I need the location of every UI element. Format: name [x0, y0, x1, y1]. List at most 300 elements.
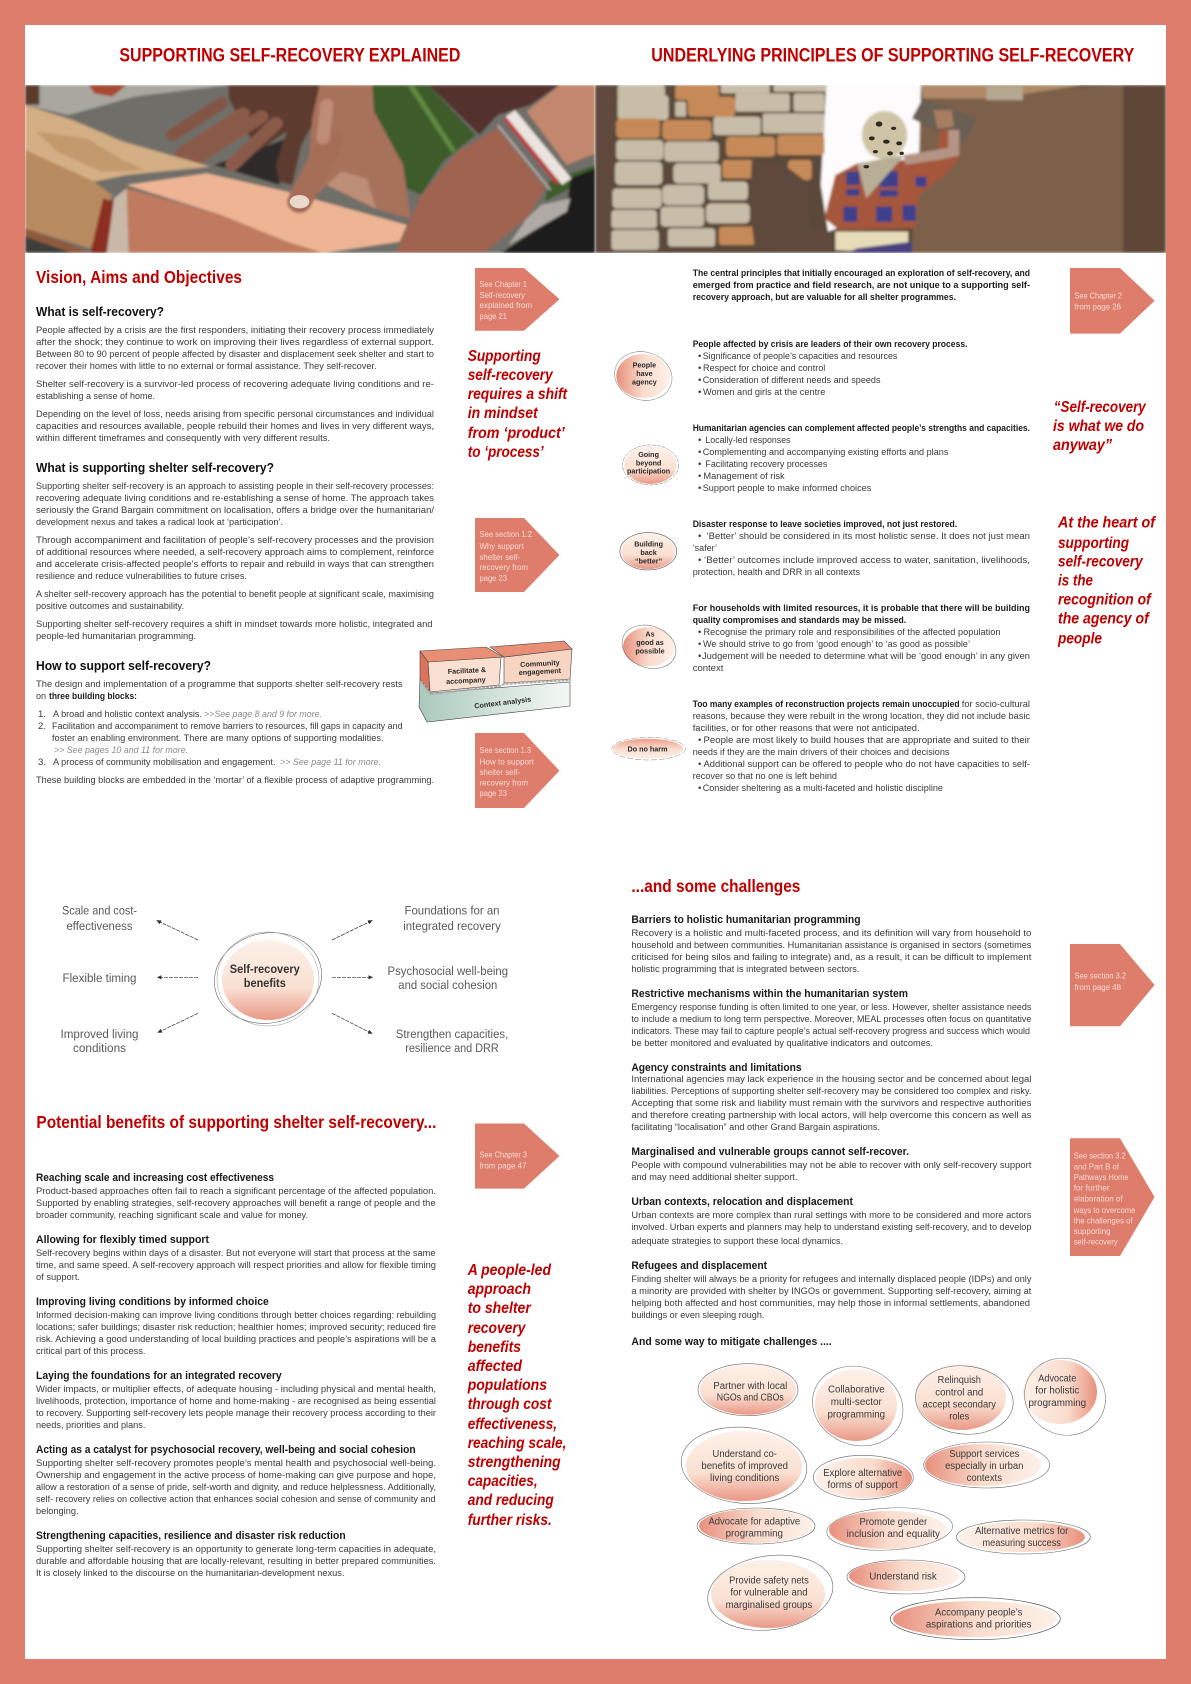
text block: How to support self-recovery?: A broad and holistic context analysis.: [53, 709, 202, 720]
benefit: psychosocial recovery: [36, 1444, 436, 1517]
text block: How to support self-recovery?: 2.: [38, 721, 46, 732]
principle: limited resources: •: [693, 627, 701, 638]
benefit: foundations: livelihoods, protection, importance of home and home-making - are recognised as being essential: [36, 1396, 436, 1407]
bubble: promote gender: inclusion and equality: [847, 1529, 940, 1540]
arrow callout: section 3.2 and Pathways Home: self-recovery: [1074, 1236, 1118, 1246]
benefit: psychosocial recovery: self- recovery relies on collective action that enhances social cohesion and sense of community and: [36, 1494, 436, 1505]
arrow callout: section 1.3: shelter self-: [480, 767, 520, 777]
arrow callout: Chapter 3: See Chapter 3: [480, 1150, 527, 1160]
pull quote: people-led approach: further risks.: [468, 1512, 552, 1529]
text block: How to support self-recovery?: Facilitation and accompaniment to remove barriers to resources, fill gaps in capacity and: [52, 721, 403, 732]
benefit: strengthen capacities: [396, 1027, 508, 1055]
principle: agencies complement: Locally-led responses: [705, 435, 791, 446]
principle: people are leaders: •: [693, 387, 701, 398]
text block: What is self-recovery?: capacities and resources available, people rebuild their homes and lives in very different ways,: [36, 421, 434, 432]
pull quote: people-led approach: [467, 1262, 566, 1529]
badge: as good as possible: good as: [636, 638, 664, 647]
arrow callout: section 3.2: [1070, 944, 1155, 1026]
challenge: restrictive mechanisms: [631, 988, 1032, 1049]
text block: How to support self-recovery?: 1.: [38, 709, 46, 720]
benefit: improved living conditions: [60, 1027, 139, 1055]
bubble: advocate holistic: Advocate: [1038, 1373, 1077, 1384]
pull quote: people-led approach: capacities,: [468, 1473, 538, 1490]
principle: limited resources: •: [693, 651, 701, 662]
principle: agencies complement: Complementing and accompanying existing efforts and plans: [703, 447, 949, 458]
text block: How to support self-recovery?: 3.: [38, 757, 46, 768]
challenge: marginalised groups: and may need additional shelter support.: [631, 1172, 797, 1183]
benefit: capacities: It is closely linked to the discourse on the humanitarian-development nexus.: [36, 1568, 344, 1579]
principle: agencies complement: [693, 423, 1030, 494]
benefit: psychosocial: Psychosocial well-being: [388, 964, 508, 978]
principle: unoccupied projects: •: [693, 759, 701, 770]
challenge: refugees: buildings or even sleeping rough.: [631, 1310, 764, 1321]
arrow callout: section 1.2: recovery from: [480, 562, 528, 572]
text block: benefits list: [36, 1172, 437, 1579]
subheading: What is self-recovery?: [36, 304, 164, 319]
arrow callout: section 1.3: See section 1.3: [480, 745, 531, 755]
photo: hands laying bricks: [25, 85, 595, 253]
benefit: foundations: Foundations for an: [404, 904, 500, 918]
arrow callout: section 3.2 and Pathways Home: Pathways Home: [1074, 1172, 1129, 1182]
principle: unoccupied projects: Too many examples of reconstruction projects remain unoccupied: [693, 699, 960, 710]
text block: central principles intro: [693, 268, 1030, 303]
bubble: understand risk: [847, 1560, 965, 1594]
bubble: support services: contexts: [967, 1473, 1002, 1484]
bubble: explore alternative: [813, 1455, 913, 1499]
benefit: living conditions: risk. Achieving a good understanding of local building practices and people’s aspirations will be a: [36, 1334, 437, 1345]
badge: people have agency: People: [633, 361, 656, 370]
pull quote: what we do anyway: [1053, 399, 1147, 454]
benefit: foundations: to recovery. Supporting self-recovery lets people manage their recovery process according to their: [36, 1408, 437, 1419]
pull quote: mindset shift: requires a shift: [468, 386, 568, 403]
diagram: self-recovery benefits: [60, 904, 508, 1055]
badge: building back better: back: [640, 548, 657, 557]
badge: building back better: “better”: [635, 556, 663, 565]
photo: woman plastering a wall: [595, 85, 1166, 253]
pull quote: people-led approach: populations: [467, 1377, 547, 1394]
arrow callout: section 3.2: See section 3.2: [1074, 970, 1126, 980]
pull quote: what we do anyway: “Self-recovery: [1054, 399, 1147, 416]
bubble: advocate adaptive: Advocate for adaptive: [708, 1516, 801, 1527]
principle: agencies complement: •: [693, 483, 701, 494]
benefit: flexible timing: Self-recovery begins within days of a disaster. But not everyone will start that process at the same: [36, 1248, 436, 1259]
arrow callout: Chapter 3: from page 47: [480, 1160, 527, 1170]
challenge: agency constraints: Agency constraints and limitations: [631, 1062, 802, 1074]
principle: people are leaders: •: [693, 375, 701, 386]
text block: What is supporting shelter self-recovery?: people-led humanitarian programming.: [36, 631, 196, 642]
central blob: [206, 923, 330, 1033]
pull quote: people-led approach: approach: [468, 1281, 531, 1298]
arrow callout: Chapter 1: Self-recovery: [480, 290, 526, 300]
pull quote: people-led approach: recovery: [468, 1320, 527, 1337]
illustration: building blocks: [419, 641, 572, 722]
arrow callout: section 3.2 and Pathways Home: ways to overcome: [1073, 1205, 1136, 1215]
benefit: capacities: durable and affordable housing that are locally-relevant, resulting in better prepared communities.: [36, 1556, 436, 1567]
benefit: improved living conditions: conditions: [73, 1041, 126, 1055]
badge: going beyond participation: Going: [638, 450, 659, 459]
arrow callout: section 3.2 and Pathways Home: [1070, 1138, 1155, 1256]
bubble: understand risk: Understand risk: [869, 1571, 937, 1582]
challenge: restrictive mechanisms: indicators. These may fail to capture people’s actual self-recovery progress and success which would: [631, 1026, 1030, 1037]
bubble: advocate holistic: programming: [1028, 1398, 1086, 1409]
bubble: collaborative: [801, 1354, 914, 1458]
text block: What is supporting shelter self-recovery?: Through accompaniment and facilitation of people’s self-recovery processes and the provision: [36, 535, 434, 546]
badge: as good as possible: As: [645, 629, 655, 638]
challenge: restrictive mechanisms: Restrictive mechanisms within the humanitarian system: [631, 988, 908, 1000]
benefit: flexible timing: Allowing for flexibly timed support: [36, 1234, 209, 1246]
principle: unoccupied projects: for socio-cultural: [962, 699, 1030, 710]
text block: What is self-recovery?: Between 80 to 90 percent of people affected by disaster and displacement seek shelter and start to: [36, 349, 434, 360]
bubble: provide safety nets: Provide safety nets: [729, 1576, 809, 1587]
principle: limited resources: Judgement will be needed to determine what will be ‘good enough’ in any given: [702, 651, 1030, 662]
badge: going beyond participation: beyond: [636, 458, 661, 468]
arrow callout: Chapter 3: [475, 1124, 560, 1189]
benefit: psychosocial: and social cohesion: [398, 978, 497, 992]
pull quote: heart of self-recovery: is the: [1058, 572, 1093, 590]
pull quote: people-led approach: benefits: [468, 1339, 521, 1356]
pull quote: people-led approach: effectiveness,: [468, 1416, 557, 1433]
arrow callout: section 1.3: [475, 733, 560, 808]
benefit: flexible timing: [36, 1234, 436, 1283]
challenge: urban contexts: [631, 1196, 1032, 1247]
arrow callout: section 1.2: Why support: [480, 541, 524, 551]
pull quote: what we do anyway: anyway”: [1053, 437, 1112, 454]
challenge: refugees: [631, 1260, 1032, 1321]
badge: do no harm: [612, 737, 685, 760]
block label: Context analysis: Context analysis: [474, 695, 532, 710]
principle: people are leaders: •: [693, 363, 701, 374]
bubble: support services: especially in urban: [945, 1461, 1023, 1472]
principle: limited resources: context: [693, 663, 724, 674]
badge: people have agency: [609, 345, 678, 407]
principle: unoccupied projects: •: [693, 783, 701, 794]
pull quote: people-led approach: A people-led: [467, 1262, 551, 1279]
arrows from centre: [160, 922, 369, 1032]
benefit: foundations: [36, 1370, 437, 1431]
arrow callout: section 1.3: How to support: [480, 756, 535, 766]
bubble: relinquish: Relinquish: [938, 1375, 981, 1386]
principle: agencies complement: •: [693, 435, 701, 446]
principle: unoccupied projects: facilities, or for other reasons that were not anticipated.: [693, 723, 920, 734]
text block: What is supporting shelter self-recovery?: and accelerate crisis-affected people’s efforts to repair and rebuild in ways that can strengthen: [36, 559, 434, 570]
challenge: barriers: holistic programming that is integrated between sectors.: [631, 964, 859, 975]
benefit: flexible timing: of support.: [36, 1272, 80, 1283]
principle: people are leaders: Respect for choice and control: [703, 363, 825, 374]
text block: How to support self-recovery?: >> See page 11 for more.: [280, 757, 381, 768]
challenge: agency constraints: facilitating “localisation” and other Grand Bargain aspirations.: [631, 1122, 880, 1133]
subheading: How to support self-recovery?: [36, 658, 211, 673]
benefit: capacities: Strengthening capacities, resilience and disaster risk reduction: [36, 1530, 346, 1542]
challenge: agency constraints: liabilities. Perceptions of supporting shelter self-recovery may be considered too complex and risky.: [631, 1086, 1031, 1097]
principle: improved not restored: •: [693, 555, 701, 566]
principle: agencies complement: Support people to make informed choices: [703, 483, 871, 494]
principle: people are leaders: •: [693, 351, 701, 362]
badge: building back better: Building: [634, 539, 663, 548]
bubble: understand co-benefits: Understand co-: [713, 1449, 777, 1460]
subheading: mitigate challenges: And some way to mitigate challenges ....: [631, 1336, 832, 1348]
principle: limited resources: [693, 603, 1030, 674]
arrow callout: section 3.2 and Pathways Home: elaboration of: [1074, 1194, 1123, 1204]
subheading: What is supporting shelter self-recovery?: [36, 460, 274, 475]
text block: central principles intro: recovery approach, but are valuable for all shelter programmes.: [693, 292, 956, 303]
text block: What is supporting shelter self-recovery?: [36, 460, 434, 642]
challenge: marginalised groups: Marginalised and vulnerable groups cannot self-recover.: [631, 1146, 909, 1158]
principle: agencies complement: •: [693, 459, 701, 470]
text block: What is supporting shelter self-recovery?: A shelter self-recovery approach has the potential to benefit people at significant scale, maximising: [36, 589, 434, 600]
bubble cluster: ways to mitigate challenges: [678, 1345, 1118, 1640]
text block: What is supporting shelter self-recovery?: recovering adequate living conditions and re-establishing a sense of home. The approach takes: [36, 493, 434, 504]
bubble: collaborative: multi-sector: [831, 1397, 883, 1408]
principle: unoccupied projects: People are most likely to build houses that are appropriate and suited to their: [704, 735, 1031, 746]
challenge: barriers: [631, 914, 1032, 975]
bubble: relinquish: control and: [935, 1387, 983, 1398]
bubble: provide safety nets: for vulnerable and: [730, 1588, 808, 1599]
challenge: refugees: Finding shelter will always be a priority for refugees and internally displaced people (IDPs) and only: [631, 1274, 1032, 1285]
pull quote: heart of self-recovery: self-recovery: [1058, 554, 1144, 570]
arrow callout: section 3.2 and Pathways Home: and Part B of: [1074, 1162, 1120, 1172]
principle: unoccupied projects: needs if they are the main drivers of their choices and decisions: [693, 747, 950, 758]
challenge: refugees: a minority are provided with shelter by INGOs or government. Supporting self-recovery, aiming at: [631, 1286, 1032, 1297]
heading: Potential benefits: Potential benefits of supporting shelter self-recovery...: [36, 1112, 436, 1132]
benefit: foundations: integrated recovery: [403, 919, 502, 933]
principle: unoccupied projects: Consider sheltering as a multi-faceted and holistic discipline: [703, 783, 943, 794]
challenge: urban contexts: adequate strategies to support these local dynamics.: [631, 1236, 843, 1247]
block label: Community: Community: [520, 658, 560, 669]
challenge: marginalised groups: People with compound vulnerabilities may not be able to recover with only self-recovery support: [631, 1160, 1032, 1171]
principle: limited resources: Recognise the primary role and responsibilities of the affected population: [704, 627, 1000, 638]
benefit: foundations: Laying the foundations for an integrated recovery: [36, 1370, 282, 1382]
pull quote: people-led approach: affected: [468, 1358, 522, 1375]
pull quote: mindset shift: [468, 348, 568, 461]
principle: unoccupied projects: [693, 699, 1031, 794]
pull quote: mindset shift: self-recovery: [468, 367, 554, 384]
principle: agencies complement: •: [693, 447, 701, 458]
pull quote: heart of self-recovery: recognition of: [1058, 592, 1152, 608]
bubble: promote gender: [826, 1505, 954, 1553]
benefit: reaching scale: Supported by enabling strategies, self-recovery approaches will benefit a range of people and the: [36, 1198, 436, 1209]
benefit: psychosocial: [388, 964, 508, 992]
pull quote: people-led approach: strengthening: [468, 1454, 561, 1471]
principle: people are leaders: Significance of people’s capacities and resources: [703, 351, 898, 362]
text block: How to support self-recovery?: >>See page 8 and 9 for more.: [204, 709, 322, 720]
block label: Facilitate and accompany: Facilitate &: [447, 665, 486, 676]
bubble: collaborative: Collaborative: [828, 1385, 885, 1396]
text block: What is self-recovery?: [35, 304, 434, 444]
principle: improved not restored: Disaster response to leave societies improved, not just restored.: [693, 519, 957, 530]
text block: What is supporting shelter self-recovery?: Supporting shelter self-recovery is an approach to assisting people in their self-recovery processes:: [36, 481, 434, 492]
bubble: support services: Support services: [949, 1449, 1019, 1460]
pull quote: people-led approach: to shelter: [468, 1300, 532, 1317]
arrow callout: Chapter 1: [475, 268, 560, 331]
bubble: advocate adaptive: [697, 1508, 815, 1544]
badge: building back better: [620, 533, 677, 570]
arrow callout: section 1.3: page 23: [480, 788, 507, 798]
arrow callout: section 1.2: [475, 518, 560, 592]
bubble: advocate adaptive: programming: [726, 1529, 783, 1540]
pull quote: people-led approach: reaching scale,: [468, 1435, 566, 1452]
benefit: reaching scale: [36, 1172, 436, 1221]
benefit: psychosocial recovery: Supporting shelter self-recovery promotes people’s mental health and psychosocial well-being.: [36, 1458, 436, 1469]
benefit: improved living conditions: Improved living: [60, 1027, 139, 1041]
bubble: provide safety nets: [703, 1547, 838, 1638]
challenge: restrictive mechanisms: Emergency response funding is often limited to one year, or less. However, shelter assistance needs: [631, 1002, 1032, 1013]
principle: agencies complement: Facilitating recovery processes: [705, 459, 827, 470]
principle: people are leaders: Women and girls at the centre: [703, 387, 825, 398]
benefit: living conditions: locations; safer buildings; disaster risk reduction; healthier homes; improved security; reduced fire: [36, 1322, 436, 1333]
benefit: scale and cost-effectiveness: Scale and cost-: [62, 904, 137, 918]
pull quote: heart of self-recovery: people: [1057, 630, 1102, 648]
pull quote: people-led approach: and reducing: [468, 1492, 554, 1509]
text block: How to support self-recovery?: three building blocks:: [49, 691, 137, 702]
pull quote: people-led approach: through cost: [468, 1396, 552, 1413]
block label: accompany: accompany: [446, 675, 486, 686]
principle: unoccupied projects: recover so that no one is left behind: [693, 771, 837, 782]
principle: limited resources: We should strive to go from ‘good enough’ to ‘as good as possible’: [703, 639, 970, 650]
pull quote: what we do anyway: is what we do: [1053, 418, 1144, 435]
challenge: barriers: Barriers to holistic humanitarian programming: [631, 914, 861, 926]
text block: What is self-recovery?: after the shock; they continue to work on improving their lives regardless of external support.: [36, 337, 434, 348]
bubble: support services: [924, 1442, 1050, 1488]
benefit: strengthen capacities: resilience and DRR: [405, 1041, 499, 1055]
arrow callout: Chapter 2: [1070, 268, 1155, 334]
arrow callout: Chapter 1: explained from: [480, 300, 532, 310]
badge: as good as possible: [616, 618, 682, 676]
bubble: partner: Partner with local: [713, 1381, 787, 1392]
text block: What is self-recovery?: within different timeframes and consequently with very different results.: [35, 433, 330, 444]
principle: agencies complement: Humanitarian agencies can complement affected people’s strengths and capacities.: [693, 423, 1030, 434]
pull quote: heart of self-recovery: supporting: [1058, 535, 1129, 552]
badge: going beyond participation: [623, 445, 679, 485]
arrow callout: section 1.2: See section 1.2: [480, 529, 532, 539]
arrow callout: Chapter 1: page 21: [480, 311, 507, 321]
benefit: reaching scale: Product-based approaches often fail to reach a significant percentage of the affected population.: [36, 1186, 436, 1197]
bubble: alternative metrics: [956, 1520, 1090, 1554]
arrow callout: section 1.2: shelter self-: [480, 552, 520, 562]
bubble: promote gender: Promote gender: [859, 1517, 928, 1528]
text block: What is supporting shelter self-recovery?: Supporting shelter self-recovery requires a shift in mindset towards more holistic, integrated and: [36, 619, 432, 630]
badge: as good as possible: possible: [635, 646, 665, 655]
bubble: provide safety nets: marginalised groups: [726, 1600, 812, 1611]
challenge: urban contexts: Urban contexts are more complex than rural settings with more to be considered and more actors: [631, 1210, 1032, 1221]
benefit: living conditions: Improving living conditions by informed choice: [36, 1296, 269, 1308]
benefit: reaching scale: Reaching scale and increasing cost effectiveness: [36, 1172, 274, 1184]
benefit: living conditions: [36, 1296, 437, 1357]
principle: improved not restored: [693, 519, 1030, 578]
challenge: agency constraints: [631, 1062, 1032, 1133]
principle: unoccupied projects: reasons, because they were rebuilt in the wrong location, they did not include basic: [693, 711, 1030, 722]
challenge: restrictive mechanisms: be better monitored and evaluated by qualitative indicators and outcomes.: [631, 1038, 933, 1049]
benefit: scale and cost-effectiveness: effectiveness: [66, 919, 132, 933]
text block: What is self-recovery?: Shelter self-recovery is a survivor-led process of recovering adequate living conditions and re-: [36, 379, 434, 390]
bubble: alternative metrics: measuring success: [983, 1538, 1061, 1549]
badge: going beyond participation: participation: [627, 466, 670, 475]
heading: and some challenges: ...and some challenges: [631, 876, 801, 896]
benefit: psychosocial recovery: Acting as a catalyst for psychosocial recovery, well-being and social cohesion: [36, 1444, 416, 1456]
bubble: collaborative: programming: [827, 1409, 885, 1420]
challenge: urban contexts: Urban contexts, relocation and displacement: [631, 1196, 853, 1208]
text block: How to support self-recovery?: These building blocks are embedded in the ‘mortar’ of a flexible process of adaptive programming.: [36, 775, 434, 786]
benefit: flexible timing: time, and same speed. A self-recovery approach will respect priorities and allow for flexible timing: [36, 1260, 436, 1271]
principle: people are leaders: People affected by crisis are leaders of their own recovery process.: [693, 339, 968, 350]
principle: people are leaders: Consideration of different needs and speeds: [703, 375, 881, 386]
pull quote: heart of self-recovery: At the heart of: [1057, 514, 1157, 532]
benefit: psychosocial recovery: belonging.: [36, 1506, 78, 1517]
principle: limited resources: quality compromises and standards may be missed.: [693, 615, 906, 626]
arrow callout: section 3.2 and Pathways Home: the challenges of: [1074, 1216, 1133, 1226]
badge: people have agency: have: [636, 369, 653, 378]
bubble: partner: [698, 1364, 798, 1416]
pull quote: mindset shift: from ‘product’: [468, 425, 565, 442]
pull quote: heart of self-recovery: [1057, 514, 1157, 648]
text block: How to support self-recovery?: on: [36, 691, 46, 702]
text block: What is self-recovery?: Depending on the level of loss, needs arising from specific personal circumstances and individual: [36, 409, 434, 420]
text block: What is supporting shelter self-recovery?: seriously the Grand Bargain commitment on localisation, offers a bridge over the humanitarian/: [36, 505, 434, 516]
block label: engagement: engagement: [518, 666, 562, 677]
text block: What is supporting shelter self-recovery?: of additional resources where needed, a self-recovery approach aims to complement, reinforce: [36, 547, 434, 558]
principle: improved not restored: ‘Better’ should be considered in its most holistic sense. It does not just mean: [706, 531, 1030, 542]
benefit: scale and cost-effectiveness: [62, 904, 137, 933]
benefit: psychosocial recovery: allow a restoration of a sense of pride, self-worth and dignity, and reduce helplessness. Additionally,: [36, 1482, 436, 1493]
challenge: refugees: helping both affected and host communities, may help those in informal settlements, abandoned: [631, 1298, 1030, 1309]
bubble: partner: NGOs and CBOs: [717, 1393, 784, 1404]
principle: improved not restored: •: [693, 531, 701, 542]
bubble: relinquish: accept secondary: [923, 1399, 996, 1410]
text block: What is self-recovery?: People affected by a crisis are the first responders, initiating their recovery process immediately: [36, 325, 434, 336]
benefit: living conditions: Informed decision-making can improve living conditions through better choices regarding: rebuilding: [36, 1310, 436, 1321]
challenge: restrictive mechanisms: to include a medium to long term perspective. Moreover, MEAL processes often focus on quantitative: [631, 1014, 1031, 1025]
title: left page: SUPPORTING SELF-RECOVERY EXPLAINED: [119, 46, 460, 66]
principle: improved not restored: ‘Better’ outcomes include improved access to water, sanitation, livelihoods,: [704, 555, 1030, 566]
text block: How to support self-recovery?: A process of community mobilisation and engagement.: [53, 757, 276, 768]
challenge: barriers: household and between communities. Humanitarian assistance is organised in sectors (sometimes: [631, 940, 1032, 951]
central blob: benefits: [244, 976, 286, 990]
principle: limited resources: •: [693, 639, 701, 650]
central blob: Self-recovery: [230, 962, 300, 976]
principle: unoccupied projects: •: [693, 735, 701, 746]
text block: central principles intro: emerged from practice and field research, are not unique to a supporting self-: [693, 280, 1030, 291]
arrow callout: Chapter 2: from page 26: [1074, 302, 1121, 312]
arrow callout: section 3.2 and Pathways Home: for further: [1074, 1182, 1110, 1192]
text block: central principles intro: The central principles that initially encouraged an exploration of self-recovery, and: [693, 268, 1030, 279]
pull quote: heart of self-recovery: the agency of: [1058, 610, 1150, 628]
heading: Vision, Aims and Objectives: Vision, Aims and Objectives: [36, 267, 242, 287]
bubble: accompany aspirations: [890, 1598, 1060, 1640]
badge: people have agency: agency: [632, 377, 657, 386]
principle: people are leaders: [693, 339, 968, 398]
bubble: understand co-benefits: [678, 1422, 810, 1509]
benefit: capacities: [36, 1530, 436, 1579]
text block: How to support self-recovery?: The design and implementation of a programme that supports shelter self-recovery rests: [36, 679, 403, 690]
arrow callout: section 1.3: recovery from: [480, 778, 528, 788]
principle: agencies complement: •: [693, 471, 701, 482]
challenge: refugees: Refugees and displacement: [631, 1260, 767, 1272]
text block: How to support self-recovery?: foster an enabling environment. There are many options of supporting modalities.: [52, 733, 384, 744]
benefit: strengthen capacities: Strengthen capacities,: [396, 1027, 508, 1041]
text block: How to support self-recovery?: >> See pages 10 and 11 for more.: [54, 745, 188, 756]
principle: improved not restored: protection, health and DRR in all contexts: [693, 567, 860, 578]
benefit: capacities: Supporting shelter self-recovery is an opportunity to generate long-term capacities in adequate,: [36, 1544, 436, 1555]
challenge: urban contexts: involved. Urban experts and planners may help to understand existing self-recovery, and to develop: [631, 1222, 1031, 1233]
pull quote: mindset shift: to ‘process’: [468, 444, 544, 461]
pull quote: mindset shift: Supporting: [468, 348, 541, 365]
principle: unoccupied projects: Additional support can be offered to people who do not have capacities to self-: [704, 759, 1030, 770]
arrow callout: section 3.2 and Pathways Home: supporting: [1074, 1226, 1111, 1236]
benefit: reaching scale: broader community, reaching significant scale and value for money.: [36, 1210, 308, 1221]
text block: What is supporting shelter self-recovery?: positive outcomes and sustainability.: [36, 601, 184, 612]
bubble: explore alternative: forms of support: [828, 1480, 898, 1491]
text block: How to support self-recovery?: [36, 658, 434, 786]
pull quote: mindset shift: in mindset: [468, 405, 538, 422]
